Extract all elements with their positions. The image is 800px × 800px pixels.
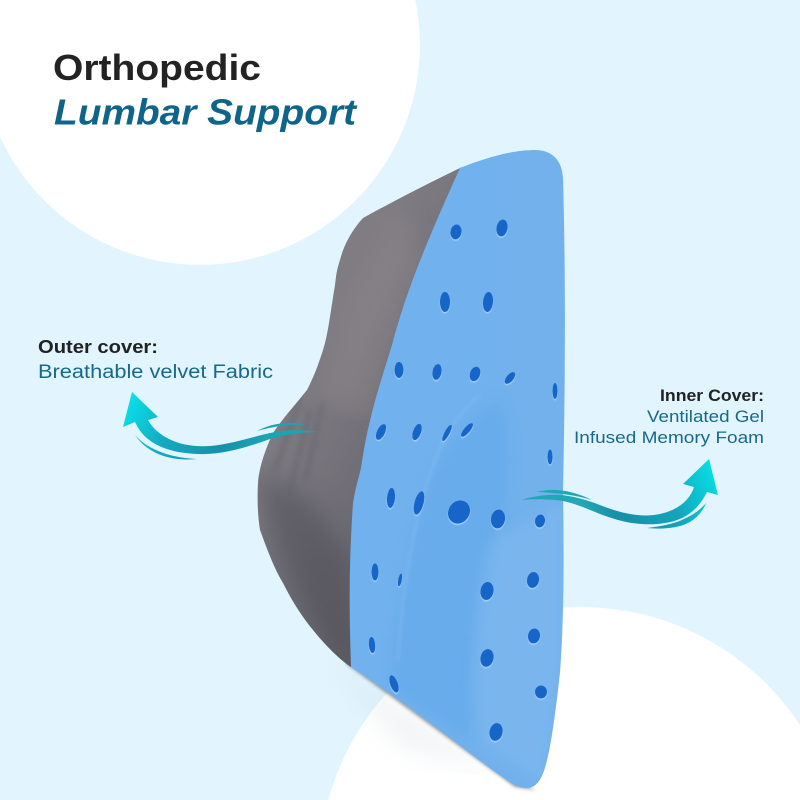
label text: Breathable velvet Fabric: Breathable velvet Fabric [38, 362, 273, 383]
label heading: Inner Cover: Inner Cover: [660, 386, 764, 405]
label: outer cover [38, 337, 273, 383]
soft wide shadow [325, 655, 500, 775]
title line: Lumbar Support: Lumbar Support [54, 92, 358, 132]
arrow: outer cover, curving up-left [123, 392, 320, 459]
ground shadow [345, 660, 535, 790]
title [53, 47, 358, 132]
arrow: inner cover, curving up-right [520, 459, 718, 529]
label: inner cover [574, 386, 764, 447]
title line: Orthopedic: Orthopedic [53, 47, 261, 88]
decorative white circle: top left [0, 0, 420, 265]
label heading: Outer cover: Outer cover: [38, 337, 158, 357]
label text: Ventilated Gel: Ventilated Gel [647, 407, 764, 426]
ventilation holes [368, 219, 558, 742]
decorative white circle: bottom right [328, 607, 800, 800]
blue gel memory foam inner face [350, 150, 565, 788]
grey velvet outer cover [258, 167, 462, 667]
label text: Infused Memory Foam: Infused Memory Foam [574, 428, 764, 447]
product: lumbar support pillow [258, 150, 565, 790]
